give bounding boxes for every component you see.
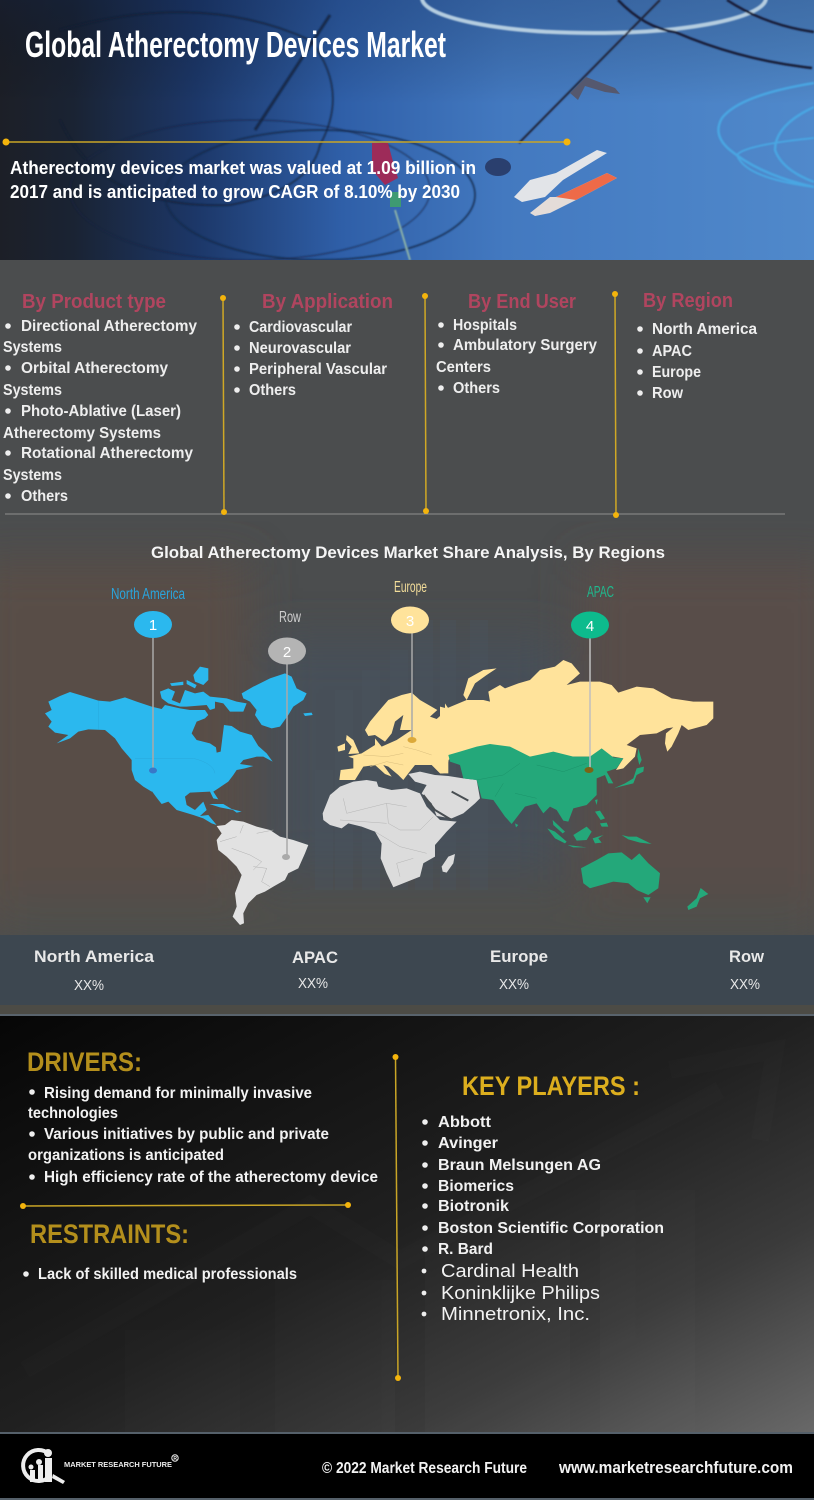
vertical divider <box>392 1054 401 1381</box>
pin 4: APAC: APAC <box>587 584 614 601</box>
table: regional share: XX% <box>730 976 760 993</box>
drivers list <box>28 1085 378 1186</box>
pin 3: Europe: 3 <box>406 613 414 630</box>
key players list: Cardinal Health <box>441 1261 579 1281</box>
pin 1: North America: North America <box>111 586 185 603</box>
icon: Market Research Future logo: R <box>173 1456 177 1462</box>
table: regional share: Europe <box>490 948 548 966</box>
panel: hero image background <box>0 0 814 260</box>
map region: Africa and Middle East <box>323 772 480 887</box>
table: regional share: XX% <box>298 975 328 992</box>
key players list: Biotronik <box>438 1198 509 1215</box>
column: by end user: Centers <box>436 359 491 376</box>
market summary text: 2017 and is anticipated to grow CAGR of 8.10% by 2030 <box>10 182 460 202</box>
key players list: Boston Scientific Corporation <box>438 1220 664 1237</box>
column: by application: Neurovascular <box>249 340 351 357</box>
key players list <box>422 1114 664 1324</box>
column: by end user: Others <box>453 380 500 397</box>
drivers list: technologies <box>28 1105 118 1122</box>
column: by application <box>234 291 393 399</box>
key players list: Abbott <box>438 1114 492 1131</box>
pin 2: Row: Row <box>279 609 301 626</box>
column: by end user: Hospitals <box>453 317 517 334</box>
map region: Europe <box>337 668 497 780</box>
column: by product type: Orbital Atherectomy <box>21 360 168 377</box>
table: regional share: Row <box>729 948 764 966</box>
column: by product type: Systems <box>3 467 62 484</box>
column: by product type: Rotational Atherectomy <box>21 445 193 462</box>
drivers list: High efficiency rate of the atherectomy device <box>44 1169 378 1186</box>
column: by product type: Atherectomy Systems <box>3 425 161 442</box>
footer bar: © 2022 Market Research Future <box>322 1460 527 1477</box>
column: by product type: Photo-Ablative (Laser) <box>21 403 181 420</box>
map section heading: Global Atherectomy Devices Market Share Analysis, By Regions <box>151 543 665 562</box>
column: by product type: Others <box>21 488 68 505</box>
column: by region <box>637 290 757 402</box>
map region: South America <box>217 820 308 925</box>
pin 3: Europe <box>391 579 429 743</box>
column: by product type <box>3 291 197 505</box>
table: regional share: North America <box>34 948 155 966</box>
column: by product type: Systems <box>3 382 62 399</box>
column: by end user <box>436 291 597 397</box>
pin 2: Row: 2 <box>283 644 291 661</box>
key players list: Minnetronix, Inc. <box>441 1304 590 1324</box>
pin 3: Europe: Europe <box>394 579 427 596</box>
pin 1: North America: 1 <box>149 617 157 634</box>
column: by end user: By End User <box>468 291 576 313</box>
column dividers <box>5 291 785 518</box>
key players list: Koninklijke Philips <box>441 1283 600 1303</box>
column: by application: Peripheral Vascular <box>249 361 387 378</box>
column: by application: By Application <box>262 291 393 313</box>
map region: North America <box>45 667 313 825</box>
column: by application: Others <box>249 382 296 399</box>
drivers list: Rising demand for minimally invasive <box>44 1085 312 1102</box>
restraints heading: RESTRAINTS: <box>30 1219 189 1249</box>
column: by application: Cardiovascular <box>249 319 352 336</box>
column: by region: Row <box>652 385 684 402</box>
panel: drivers, restraints and key players background <box>0 1014 814 1432</box>
column: by end user: Ambulatory Surgery <box>453 337 597 354</box>
panel: segments and map background <box>0 260 814 945</box>
icon: Market Research Future logo <box>23 1449 178 1484</box>
column: by region: North America <box>652 321 757 338</box>
pin 4: APAC: 4 <box>586 618 594 635</box>
pin 4: APAC <box>571 584 614 773</box>
column: by product type: Systems <box>3 339 62 356</box>
table: regional share: XX% <box>499 976 529 993</box>
restraints divider <box>20 1202 351 1209</box>
column: by product type: Directional Atherectomy <box>21 318 197 335</box>
key players list: Biomerics <box>438 1178 514 1195</box>
column: by region: By Region <box>643 290 733 312</box>
divider with gold end dots <box>2 138 570 146</box>
pin 1: North America <box>111 586 185 774</box>
column: by region: Europe <box>652 364 701 381</box>
title: Global Atherectomy Devices Market <box>25 24 446 65</box>
drivers list: organizations is anticipated <box>28 1147 224 1164</box>
table: regional share: APAC <box>292 949 338 967</box>
drivers list: Various initiatives by public and private <box>44 1126 329 1143</box>
drivers heading: DRIVERS: <box>27 1047 142 1077</box>
table: regional share: XX% <box>74 977 104 994</box>
pin 2: Row <box>268 609 306 860</box>
footer bar: www.marketresearchfuture.com <box>558 1459 793 1477</box>
key players heading: KEY PLAYERS : <box>462 1071 640 1101</box>
column: by product type: By Product type <box>22 291 166 313</box>
map region: Asia Pacific <box>448 744 708 910</box>
key players list: R. Bard <box>438 1241 493 1258</box>
market summary text: Atherectomy devices market was valued at 1.09 billion in <box>10 158 476 178</box>
key players list: Braun Melsungen AG <box>438 1157 601 1174</box>
footer bar <box>0 1432 814 1500</box>
world map <box>45 660 713 925</box>
market summary text <box>10 158 476 202</box>
icon: Market Research Future logo: MARKET RESEARCH FUTURE <box>64 1462 172 1469</box>
key players list: Avinger <box>438 1135 498 1152</box>
map region: Russia <box>440 660 713 773</box>
column: by region: APAC <box>652 343 692 360</box>
restraints list: Lack of skilled medical professionals <box>38 1266 297 1283</box>
table: regional share <box>0 935 814 1015</box>
